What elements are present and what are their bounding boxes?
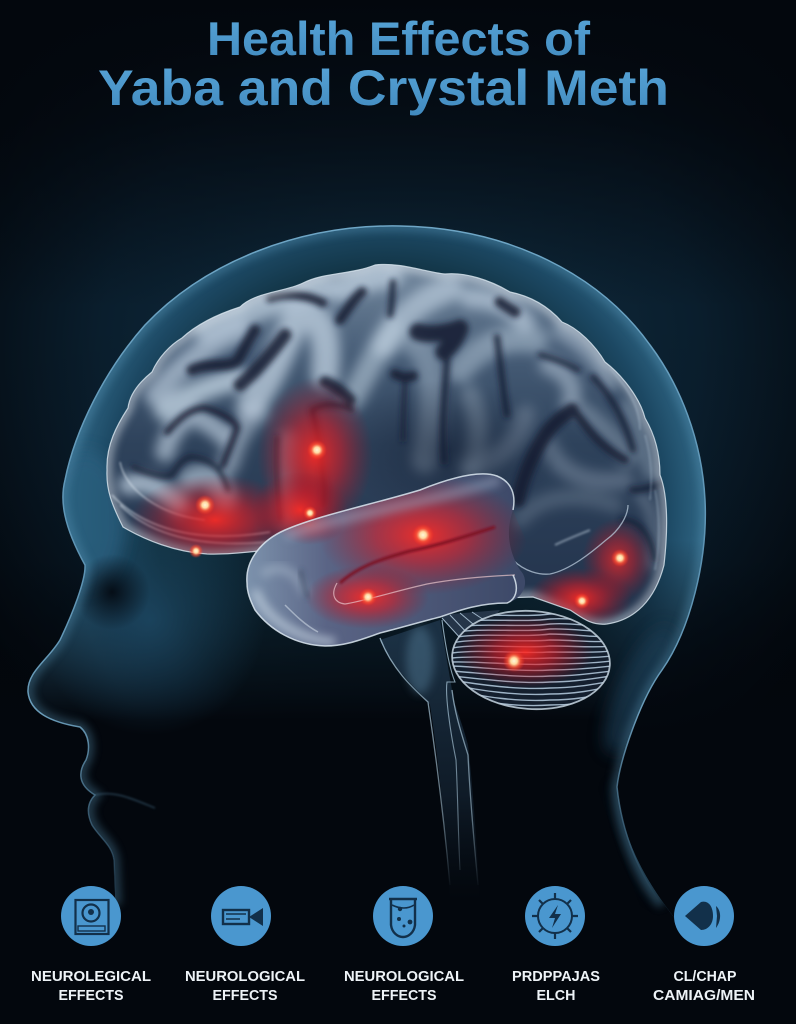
label bbox=[185, 969, 305, 1004]
frontal folds bbox=[112, 462, 270, 543]
rim light bbox=[107, 264, 667, 624]
icon: lightning sun bbox=[525, 886, 585, 946]
effect item 4 bbox=[512, 886, 600, 1004]
label bbox=[31, 969, 151, 1004]
icon: monitor badge bbox=[61, 886, 121, 946]
label: EFFECTS bbox=[58, 988, 124, 1004]
right side folds bbox=[610, 368, 659, 570]
label bbox=[344, 969, 464, 1004]
label: EFFECTS bbox=[212, 988, 278, 1004]
red activation points bbox=[189, 440, 629, 609]
label: CL/CHAP bbox=[674, 969, 737, 985]
central shading bbox=[381, 391, 530, 488]
label: ELCH bbox=[536, 988, 576, 1004]
title: Health Effects of bbox=[207, 12, 590, 65]
head silhouette bbox=[28, 226, 705, 925]
title bbox=[98, 12, 669, 116]
title: Yaba and Crystal Meth bbox=[98, 60, 669, 116]
sulci bbox=[133, 282, 663, 560]
creases bbox=[340, 527, 495, 583]
label bbox=[512, 969, 600, 1004]
cerebellum bbox=[440, 606, 613, 714]
label: PRDPPAJAS bbox=[512, 969, 600, 985]
effect item 3 bbox=[344, 886, 464, 1004]
cerebrum bbox=[107, 264, 667, 628]
icon: dark heart shape bbox=[674, 886, 734, 946]
effect item 2 bbox=[185, 886, 305, 1004]
label: CAMIAG/MEN bbox=[653, 988, 755, 1004]
effect item 1 bbox=[31, 886, 151, 1004]
icon: camera bbox=[211, 886, 271, 946]
temporal lobe bbox=[247, 474, 528, 646]
effect item 5 bbox=[653, 886, 755, 1004]
lower rim of wrapping gyrus bbox=[513, 505, 628, 574]
label: NEUROLOGICAL bbox=[185, 969, 305, 985]
red inflammation glows bbox=[130, 377, 654, 628]
label: NEUROLOGICAL bbox=[344, 969, 464, 985]
label: EFFECTS bbox=[372, 988, 437, 1004]
brain bbox=[107, 264, 667, 646]
icon: jar with drops bbox=[373, 886, 433, 946]
rounded gyri bbox=[128, 275, 655, 565]
brainstem and spinal cord bbox=[380, 620, 480, 900]
label bbox=[653, 969, 755, 1004]
label: NEUROLEGICAL bbox=[31, 969, 151, 985]
